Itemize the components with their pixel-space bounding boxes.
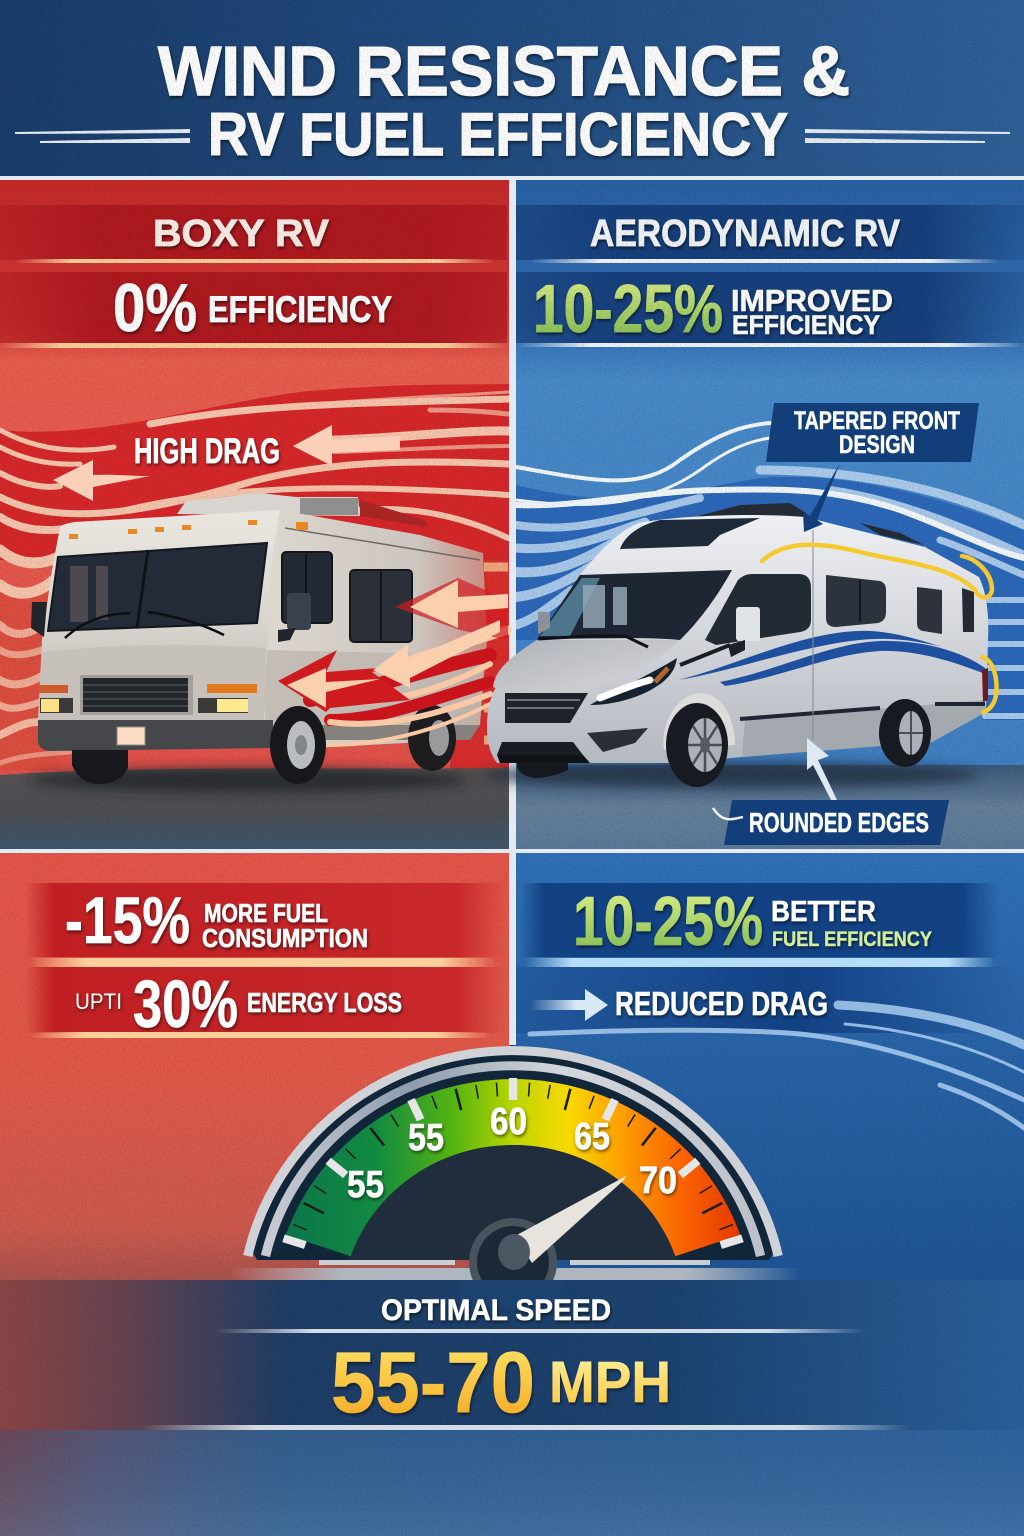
rear wheel <box>408 705 456 771</box>
panel: aerodynamic RV header and efficiency <box>516 205 1024 347</box>
front right wheel <box>270 706 326 784</box>
stat: 0% efficiency <box>113 270 392 346</box>
front splitter <box>497 755 590 763</box>
gauge hub <box>498 1234 530 1270</box>
gauge housing <box>251 1051 775 1260</box>
stat: 10-25% improved efficiency: IMPROVED <box>731 283 893 318</box>
arrows: wind hitting the boxy RV side <box>278 578 508 745</box>
stat: 10-25% improved efficiency <box>533 271 893 347</box>
illustration: boxy RV <box>30 493 487 792</box>
road: right <box>516 765 1024 850</box>
gauge speed labels: 60 <box>490 1101 527 1143</box>
windshield <box>538 570 732 640</box>
lower trim <box>740 704 985 719</box>
title: RV FUEL EFFICIENCY <box>208 101 788 168</box>
stat: 55-70 mph: MPH <box>549 1350 671 1415</box>
gauge speed labels: 65 <box>574 1116 610 1158</box>
stat: energy loss: 30% <box>133 967 238 1042</box>
gauge speed labels: 55 <box>347 1164 384 1206</box>
sunroof <box>620 518 760 549</box>
door seam <box>812 530 814 740</box>
front lower intake <box>497 742 583 755</box>
side windows <box>282 552 412 642</box>
panel: boxy RV background <box>0 180 510 850</box>
windshield <box>48 543 267 638</box>
label: optimal speed: OPTIMAL SPEED <box>381 1294 611 1327</box>
marker lights <box>69 520 308 539</box>
panel: boxy RV fuel stats <box>25 883 505 1042</box>
gauge speed labels: 70 <box>639 1160 677 1202</box>
headlights and indicators <box>39 684 257 713</box>
panel: boxy RV stats background <box>0 852 510 1282</box>
side windows <box>705 574 974 645</box>
label: reduced drag: REDUCED DRAG <box>615 985 828 1022</box>
road: left <box>0 768 510 850</box>
lower body shade <box>742 700 986 757</box>
callout: rounded edges <box>713 738 949 845</box>
stat: more fuel consumption <box>65 883 368 957</box>
stat: more fuel consumption: CONSUMPTION <box>202 923 368 953</box>
front face <box>38 510 280 720</box>
illustration: aerodynamic RV <box>480 503 996 788</box>
callout: tapered front design: DESIGN <box>839 431 915 459</box>
gauge hub ring <box>469 1218 557 1306</box>
panel: aerodynamic RV background <box>514 180 1024 850</box>
stat: more fuel consumption: -15% <box>65 883 190 957</box>
stat: better fuel efficiency: FUEL EFFICIENCY <box>772 928 932 951</box>
panel: optimal speed footer background <box>0 1280 1024 1536</box>
licence plate <box>117 727 145 745</box>
arrow: drag left <box>53 460 150 501</box>
wind streaks <box>530 1005 1024 1128</box>
blue stripes <box>678 631 985 686</box>
heading: aerodynamic RV: AERODYNAMIC RV <box>590 213 901 255</box>
stat: more fuel consumption: MORE FUEL <box>204 898 328 928</box>
fog light <box>587 728 648 752</box>
dividers <box>0 176 1024 1045</box>
mirrors <box>31 593 311 642</box>
gauge speed labels: 55 <box>408 1117 444 1159</box>
roof vents <box>698 503 924 545</box>
panel: aerodynamic RV fuel stats <box>516 882 1024 1128</box>
front wheel <box>663 693 735 787</box>
headlight <box>590 658 677 705</box>
grille <box>505 693 588 723</box>
stat: 10-25% improved efficiency: 10-25% <box>533 271 723 347</box>
stat: better fuel efficiency: 10-25% <box>573 882 763 960</box>
minor ticks <box>293 1083 733 1230</box>
heading: boxy RV: BOXY RV <box>153 213 330 255</box>
stat: 55-70 mph: 55-70 <box>331 1335 535 1431</box>
stat: 55-70 mph <box>331 1335 671 1431</box>
stat: energy loss: ENERGY LOSS <box>247 987 402 1018</box>
callout: tapered front design: TAPERED FRONT <box>794 407 960 435</box>
hood <box>493 640 680 695</box>
front left wheel <box>72 750 128 784</box>
gauge base bars <box>230 1268 800 1280</box>
grille <box>80 675 193 715</box>
stat: 0% efficiency: 0% <box>113 270 197 346</box>
mirrors <box>538 607 760 657</box>
panel: aerodynamic RV stats background <box>514 852 1024 1282</box>
bumper <box>38 720 273 751</box>
gauge speed labels <box>347 1101 677 1206</box>
gauge colour sweep <box>286 1079 740 1256</box>
panel: optimal speed <box>140 1294 910 1431</box>
rear wheel <box>879 699 931 767</box>
gauge needle <box>515 1176 626 1263</box>
title: WIND RESISTANCE & <box>158 32 850 110</box>
side wall <box>258 510 487 750</box>
stat: better fuel efficiency: BETTER <box>771 896 876 928</box>
callout pointer <box>803 463 840 532</box>
chart: aerodynamic wind flow <box>516 423 1024 720</box>
black trim line <box>680 645 730 665</box>
callout: rounded edges: ROUNDED EDGES <box>749 807 929 838</box>
front under wheel <box>517 760 568 778</box>
stat: 10-25% improved efficiency: EFFICIENCY <box>732 310 880 340</box>
yellow highlight curves <box>762 545 996 712</box>
header background <box>0 0 1024 178</box>
label: high drag <box>53 425 400 501</box>
callout: tapered front design <box>766 403 979 532</box>
gauge face <box>347 1145 679 1260</box>
arrow: reduced drag <box>530 989 608 1021</box>
tail light <box>982 668 988 702</box>
stat: better fuel efficiency <box>573 882 932 960</box>
stat: 0% efficiency: EFFICIENCY <box>208 289 392 330</box>
stat: energy loss <box>75 967 402 1042</box>
roof air conditioner <box>177 493 427 527</box>
body <box>487 515 988 763</box>
footer top mask <box>460 1280 566 1306</box>
gauge base highlights <box>319 1260 710 1265</box>
gauge: optimal speed speedometer <box>230 1051 800 1306</box>
chart: high drag wind flow <box>0 384 510 770</box>
stat: energy loss: UPTI <box>75 989 122 1014</box>
panel: boxy RV header and efficiency <box>0 205 507 348</box>
label: high drag: HIGH DRAG <box>134 432 280 471</box>
title <box>158 32 850 168</box>
arrow: drag right <box>293 425 400 466</box>
major ticks <box>284 1078 742 1245</box>
